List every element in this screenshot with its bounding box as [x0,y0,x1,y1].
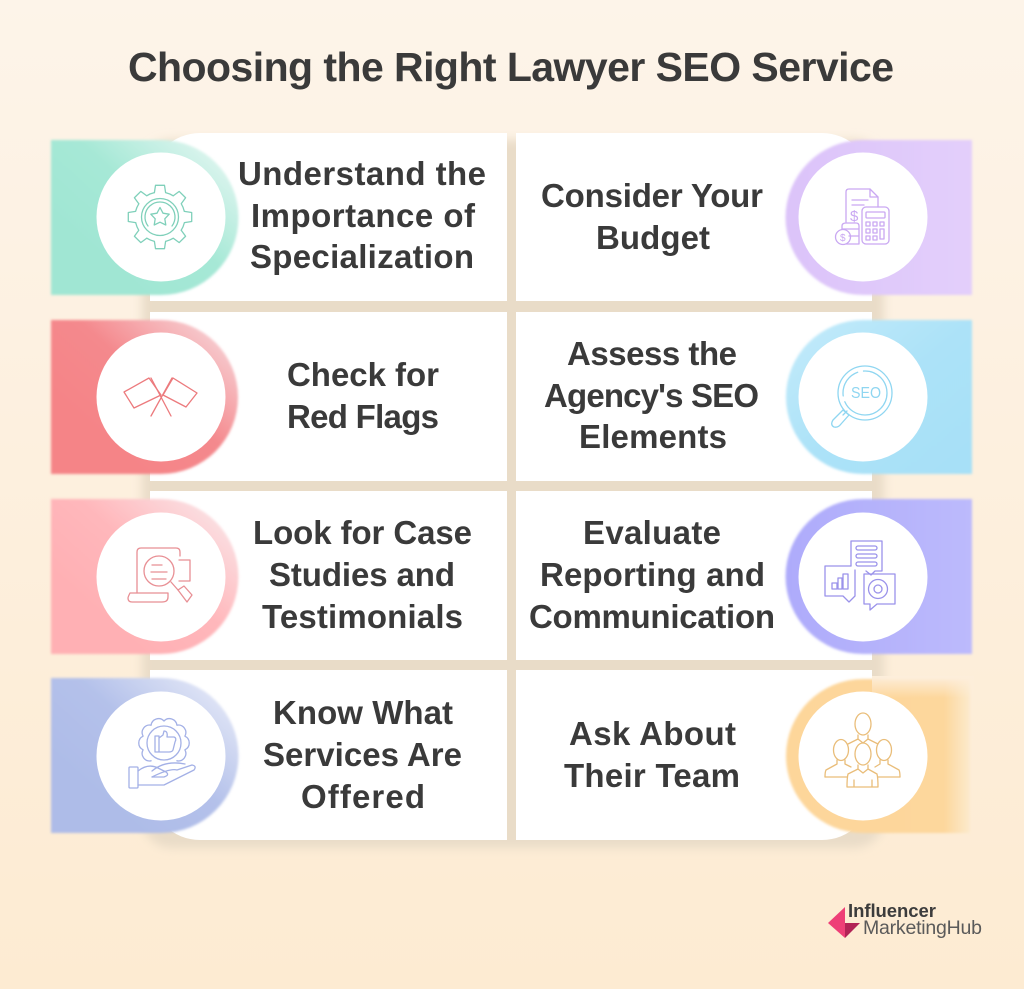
icon: budget calculator and coins: $ [840,233,846,244]
label: Their Team [564,757,740,794]
colour tab [786,140,972,295]
logo mark [828,907,860,938]
icon: seo magnifier: SEO [851,385,881,402]
icon circle [96,512,226,642]
card [150,312,507,481]
card [516,133,872,301]
logo wordmark [848,900,982,939]
label: Communication [529,598,775,635]
colour tab [786,320,972,474]
label: Know What [273,694,453,731]
colour tab [786,499,972,654]
colour tab [51,140,238,295]
label: Reporting and [540,556,765,593]
label: Understand the [238,155,486,192]
icon: team of people [825,713,900,787]
icon circle [798,152,928,282]
label: Evaluate [583,514,721,551]
icon: budget calculator and coins: $ [850,208,859,225]
icon circle [96,692,226,820]
panel: look for case studies and testimonials [51,491,507,660]
label [238,155,486,275]
label [541,177,763,256]
icon circle [96,332,226,462]
logo wordmark: Influencer [848,900,936,921]
panel: assess the agency's seo elements [516,312,972,481]
label [544,335,759,455]
label [564,715,740,794]
label: Importance of [251,197,476,234]
icon: budget calculator and coins [836,189,889,244]
colour tab [51,499,238,654]
label: Red Flags [287,398,439,435]
label: Agency's SEO [544,377,759,414]
icon circle [798,512,928,642]
label: Ask About [569,715,736,752]
icon circle [96,152,226,282]
label: Consider Your [541,177,763,214]
icon circle [798,692,928,820]
panel: understand the importance of specialization [51,133,507,301]
colour tab [51,320,238,474]
logo: influencer marketing hub [828,900,982,939]
label: Studies and [269,556,455,593]
label: Look for Case [253,514,472,551]
icon: report speech bubbles [825,541,895,610]
label: Budget [596,219,710,256]
panel: ask about their team [516,670,974,840]
panel: consider your budget [516,133,972,301]
icon: seo magnifier [832,366,892,427]
label: Specialization [250,238,474,275]
card [516,312,872,481]
label: Check for [287,356,439,393]
card [516,491,872,660]
card [150,133,507,301]
label: Testimonials [262,598,463,635]
logo wordmark: MarketingHub [863,917,982,939]
label [287,356,439,435]
card [150,670,507,840]
title: Choosing the Right Lawyer SEO Service [128,44,894,90]
icon: crossed red flags [124,378,197,416]
colour tab [786,679,970,833]
label: Assess the [567,335,737,372]
label: Services Are [263,736,462,773]
icon: document with magnifier [128,548,192,602]
panel: evaluate reporting and communication [516,491,972,660]
label [263,694,462,815]
card [516,670,872,840]
icon circle [798,332,928,462]
icon: hand with thumbs-up badge [129,719,195,788]
icon: gear with star [128,185,192,249]
card [150,491,507,660]
panel: know what services are offered [51,670,507,840]
label: Offered [301,778,425,815]
label [253,514,472,635]
label: Elements [579,418,727,455]
label [529,514,775,635]
colour tab [51,678,238,833]
panel: check for red flags [51,312,507,481]
